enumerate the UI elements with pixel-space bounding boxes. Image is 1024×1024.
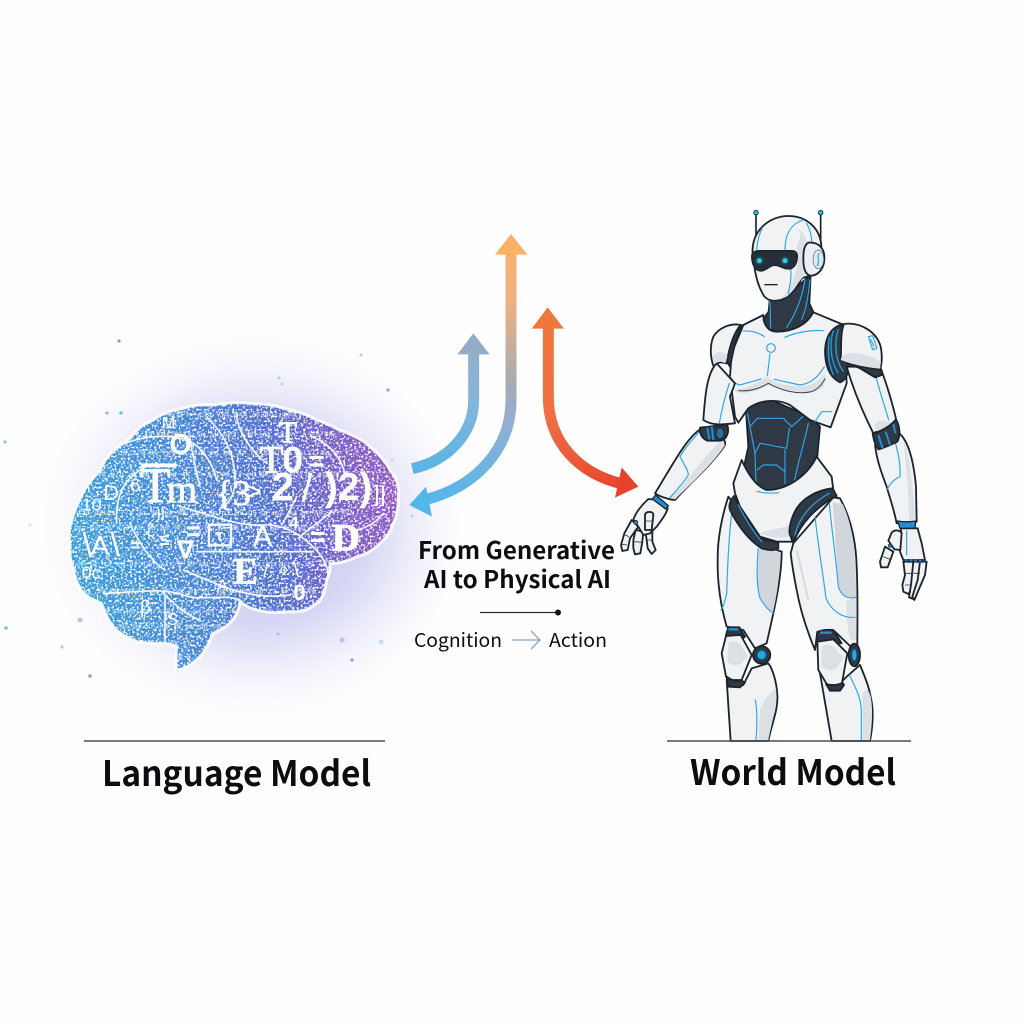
large symbols in the brain: E xyxy=(233,550,258,591)
left leg xyxy=(718,497,782,741)
left shin xyxy=(727,663,777,741)
large symbols in the brain: 10 xyxy=(82,495,102,515)
large symbols in the brain: A xyxy=(91,530,110,561)
brain texture: tiny symbols and speckle: Σ8 =π k3 ∂y /λ 2∫ Ω7 φa μ= 4x θ5 [Δ] ψ1 τq xyxy=(100,607,285,616)
left forearm xyxy=(655,430,725,500)
large symbols in the brain: 0 xyxy=(293,580,306,605)
left pelvis band xyxy=(729,496,778,550)
pelvis xyxy=(733,457,833,542)
brain texture: tiny symbols and speckle: Ψ0 7∑y ab= ∂π 3/θ k∞ [x] ΩL 9≠1 λ∫ m4 β= r2 ΔΣ (n) φ5 ε/ 8q Λ= xyxy=(70,449,343,458)
brain silhouette xyxy=(63,400,403,673)
glow behind brain xyxy=(20,335,450,715)
large symbols in the brain: \ xyxy=(83,527,93,564)
torso abdomen xyxy=(737,397,820,497)
large symbols in the brain: \ xyxy=(293,560,299,582)
center title: AI to Physical AI xyxy=(423,560,611,595)
large symbols in the brain: ≤ xyxy=(160,529,170,549)
large symbols in the brain: )2) xyxy=(325,466,372,509)
large symbols in the brain: 6 xyxy=(130,475,140,496)
large symbols in the brain: T xyxy=(278,416,297,450)
large symbols in the brain: > xyxy=(245,476,261,507)
large symbols in the brain: S xyxy=(167,609,178,629)
large symbols in the brain: T xyxy=(259,437,283,481)
left shoulder and arm xyxy=(655,324,742,500)
right leg xyxy=(791,497,873,741)
ground line: right xyxy=(667,740,911,742)
large symbols in the brain: O xyxy=(169,429,192,461)
ear xyxy=(803,243,824,276)
large symbols in the brain: D xyxy=(103,481,119,505)
label: language model: Language Model xyxy=(102,746,371,797)
large symbols in the brain: D xyxy=(332,516,360,560)
label: world model: World Model xyxy=(690,745,896,796)
head xyxy=(752,216,824,301)
large symbols in the brain: / xyxy=(263,561,268,581)
brain texture: tiny symbols and speckle: 5μ ∂= bΣ x3 ≠π 8∫ [a] kλ /Ω 2θ φy =7 ψ4 Δ1 qε 9τ ρ= Λ0 n∇ e6 x/ xyxy=(63,561,341,570)
large symbols in the brain: τ xyxy=(216,526,223,545)
cognition to action caption: Cognition xyxy=(414,626,502,653)
large symbols in the brain: A xyxy=(217,576,229,596)
brain texture: tiny symbols and speckle: ∂7 Σ= xyxy=(170,641,193,650)
right shoulder and arm xyxy=(825,324,917,523)
antennas xyxy=(754,210,823,243)
center title: From Generative xyxy=(418,531,615,566)
left elbow xyxy=(700,425,728,441)
large symbols in the brain: = xyxy=(308,446,325,477)
robot illustration: world model xyxy=(621,210,927,741)
large symbols in the brain: ∇ xyxy=(177,536,195,564)
large symbols in the brain: = xyxy=(310,522,326,552)
right pelvis band xyxy=(789,488,837,543)
divider line with dot xyxy=(480,610,561,616)
ground line: left xyxy=(84,740,385,742)
brain texture: tiny symbols and speckle: 7Σ π= 3∂ x/ λ9 ∫k a2 μΩ =φ 5y Δ4 xyxy=(107,622,248,631)
arrows xyxy=(409,234,638,517)
right elbow xyxy=(873,419,899,449)
brain illustration: language model xyxy=(3,339,436,685)
large symbols in the brain: = xyxy=(186,518,201,546)
brain texture: tiny symbols and speckle xyxy=(63,400,403,673)
large symbols in the brain: / xyxy=(302,467,313,511)
large symbols in the brain: ]] xyxy=(373,482,386,507)
center title xyxy=(418,531,615,595)
cognition to action caption xyxy=(414,626,607,653)
large symbols in the brain: o xyxy=(280,561,287,576)
large symbols in the brain: 4 xyxy=(289,512,299,532)
large symbols in the brain: A xyxy=(253,521,273,554)
brain texture: tiny symbols and speckle: x3 π xyxy=(173,655,192,663)
large symbols in the brain xyxy=(82,413,386,629)
large symbols in the brain: M xyxy=(162,413,176,432)
arrow: muted blue xyxy=(412,333,490,469)
large symbols in the brain: 0 xyxy=(282,439,303,481)
brain texture: tiny symbols and speckle: a∫ 3= Ωk π/ 7Σ ∂b μ1 ≥x 9λ θ[ ]q φ= 5Δ y8 τ2 ψ/ e0 ∇4 Λr xyxy=(83,587,330,596)
brain texture: tiny symbols and speckle: π7 q= Σ∂ ≈2 x/3 Λk ∫b μ9 [r] 6Ω θ= y4 ∇a /8 φ0 β5 Δn 1ψ ≤e 7λ =d xyxy=(63,524,345,533)
visor xyxy=(752,251,797,271)
brain texture: tiny symbols and speckle: x=Σ∂λ 4π7 aβ∫ 9kΩ=2 μ3 θ/φ 1∞ rT8 ∇y5 e≠π λ6 Hq2 ψ%0 n=d xyxy=(67,411,313,420)
brain texture: tiny symbols and speckle: 0∫ a=β ∂3 Σx 7/π λ≈ ψ9 μk 4Δ [n] =φ ρ1 8θ Ω5 q/ ε2 x∞ b≠ Λ6 3∇ τy xyxy=(63,509,350,518)
lower body and hands, offset to lower frame xyxy=(621,488,927,741)
right shin xyxy=(820,665,873,741)
large symbols in the brain: II xyxy=(157,507,165,524)
arrow: red orange xyxy=(532,307,638,498)
large symbols in the brain: 0c xyxy=(82,562,101,582)
large symbols in the brain: = xyxy=(130,536,141,556)
large symbols in the brain: m xyxy=(167,467,197,511)
neck xyxy=(763,275,814,332)
arrow: orange to blue xyxy=(409,234,527,517)
left knee xyxy=(726,627,745,639)
large symbols in the brain: T xyxy=(140,457,171,513)
brain texture: tiny symbols and speckle: 8∂k μ= γ2 p/q √x ≥1 zΣ πa 4H ∇= 6λ ψd ∫7 ×b Δ9 Ω/ r3 [τ] e= k0 2y xyxy=(67,471,353,480)
scattered particles xyxy=(3,339,413,678)
right knee xyxy=(817,630,842,643)
brain fold lines xyxy=(103,413,383,643)
cognition to action caption: Action xyxy=(549,626,607,653)
brain texture: tiny symbols and speckle: {3a} ∂x/7 π≈b Λ+0 ξ9 fn(2) Σk ≤ω 5μ ΔZ1 ρ/8 ∫dx τ4 =c a²+b σ6 xyxy=(65,431,333,440)
large symbols in the brain: β xyxy=(140,597,151,618)
chest plate xyxy=(730,312,847,427)
left hand xyxy=(621,495,668,554)
large symbols in the brain: ζ xyxy=(147,521,155,541)
right forearm xyxy=(875,432,917,523)
large symbols in the brain: \ xyxy=(111,527,121,564)
large symbols in the brain: {3 xyxy=(216,473,251,513)
large symbols in the brain: 2 xyxy=(272,466,294,510)
right hand xyxy=(880,521,927,600)
